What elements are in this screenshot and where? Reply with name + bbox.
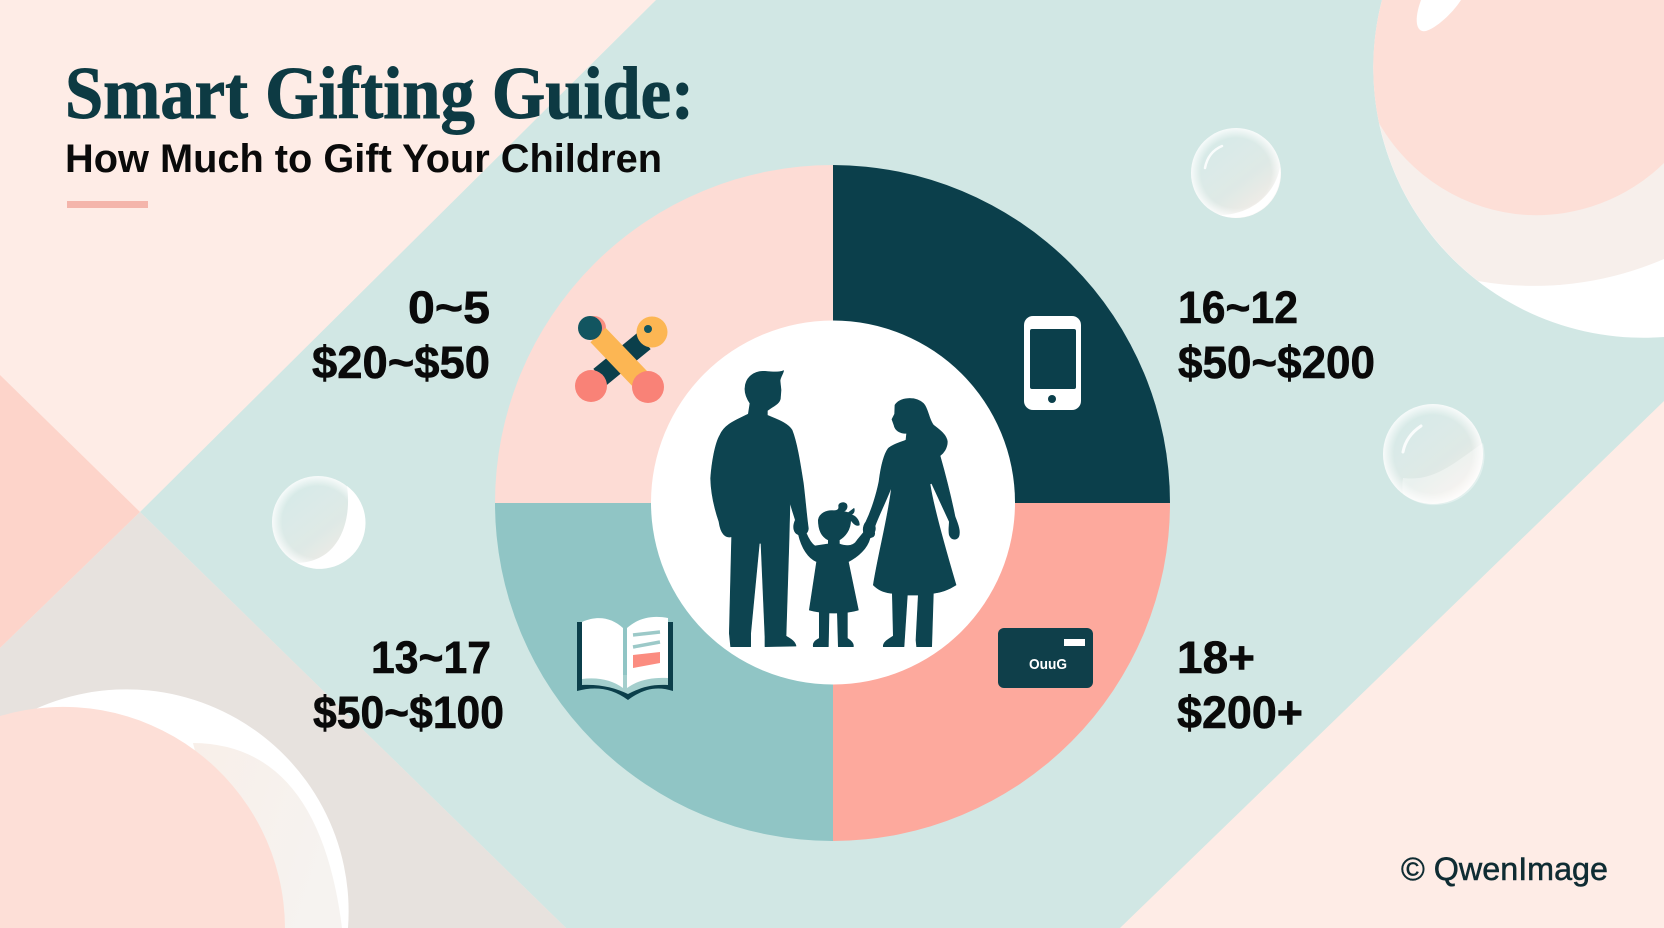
toy dot	[644, 325, 652, 333]
book page shade	[582, 675, 668, 694]
toy coral knob left	[575, 370, 607, 402]
mother	[863, 398, 959, 647]
icon: book	[577, 617, 673, 700]
phone screen	[1030, 329, 1076, 389]
label: ages 13~17: 13~17	[371, 632, 491, 683]
card body	[998, 628, 1093, 688]
bubble: right	[1383, 404, 1485, 505]
label: ages 18+: $200+	[1177, 687, 1303, 738]
icon: smartphone	[1024, 316, 1081, 410]
segment: ages 6-12	[833, 165, 1170, 503]
segment: ages 0-5	[495, 165, 833, 503]
toy yellow bar	[598, 335, 642, 381]
bubble: upper right	[1191, 128, 1281, 218]
segment: ages 13-17	[495, 503, 833, 841]
title: Smart Gifting Guide:	[65, 53, 694, 135]
label: ages 18+	[1177, 632, 1303, 738]
centre circle	[651, 320, 1015, 684]
toy teal knob	[578, 316, 602, 340]
card text: OuuG	[1029, 656, 1067, 673]
toy coral knob right	[632, 371, 664, 403]
label: ages 13~17	[313, 632, 504, 738]
toy dark bar	[600, 341, 644, 377]
book red block	[633, 652, 660, 668]
book cover	[577, 622, 673, 700]
bubble: left	[272, 476, 366, 569]
label: ages 0~5: 0~5	[408, 282, 490, 333]
background: grey wedge	[0, 512, 566, 928]
icon: gift card	[998, 628, 1093, 688]
accent rule	[67, 201, 148, 208]
subtitle: How Much to Gift Your Children	[65, 137, 662, 181]
child legs	[813, 612, 853, 647]
father	[711, 371, 808, 647]
book text lines	[633, 632, 660, 647]
child	[794, 503, 875, 613]
label: ages 0~5	[312, 282, 490, 388]
watermark: © QwenImage	[1401, 851, 1608, 887]
icon: toy	[575, 316, 668, 403]
toy back pink knob	[582, 316, 606, 340]
label: ages 16~12: 16~12	[1178, 282, 1298, 333]
decorative sphere: bottom left	[0, 689, 349, 928]
book left page	[582, 618, 623, 688]
segment: ages 18+	[833, 503, 1170, 841]
family silhouette	[711, 371, 959, 647]
toy yellow knob	[636, 316, 668, 348]
label: ages 18+: 18+	[1177, 632, 1255, 683]
pie chart: four age groups	[495, 165, 1170, 841]
label: ages 16~12: $50~$200	[1178, 337, 1375, 388]
book right page	[627, 617, 668, 688]
background: coral triangle	[0, 375, 140, 648]
label: ages 0~5: $20~$50	[312, 337, 490, 388]
decorative sphere: top right	[1373, 0, 1664, 338]
card chip	[1064, 639, 1085, 646]
phone button	[1048, 395, 1056, 403]
label: ages 13~17: $50~$100	[313, 687, 504, 738]
phone body	[1024, 316, 1081, 410]
title block	[65, 53, 694, 208]
label: ages 16~12	[1178, 282, 1375, 388]
